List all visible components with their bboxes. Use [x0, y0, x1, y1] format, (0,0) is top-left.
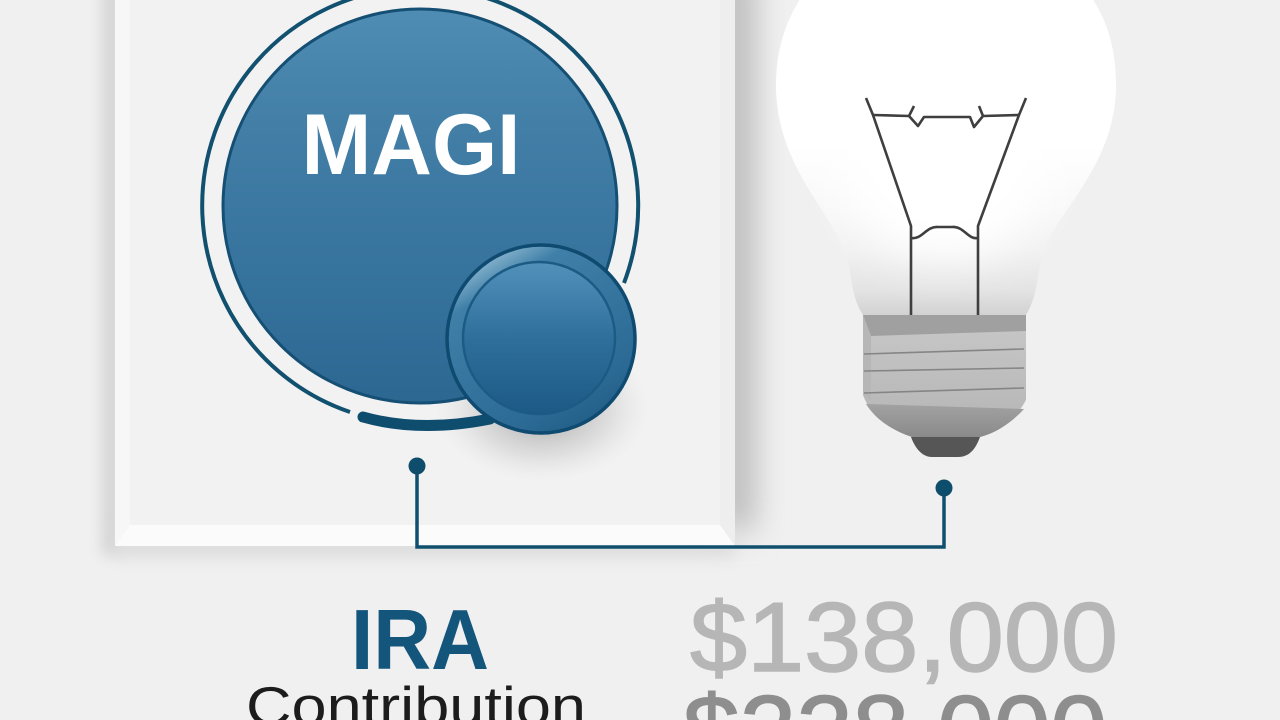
main disc [223, 9, 617, 403]
MAGI label: MAGI [302, 97, 520, 193]
small button [447, 245, 635, 433]
icon: MAGI dial [202, 0, 650, 482]
infographic canvas [98, 0, 1116, 720]
bulb glass [776, 0, 1116, 315]
inner glow [845, 70, 1045, 260]
panel: raised card [102, 0, 754, 557]
outer ring [202, 0, 638, 412]
heading: IRA: IRA [351, 593, 489, 688]
icon: light bulb [776, 0, 1116, 457]
connector line [408, 458, 952, 547]
screw base [863, 315, 1026, 457]
figure: $138,000: $138,000 [690, 582, 1118, 692]
filament wires [866, 98, 1026, 315]
thick arc accent [363, 417, 490, 426]
bulb tip [911, 437, 980, 457]
small button shadow [434, 334, 650, 482]
